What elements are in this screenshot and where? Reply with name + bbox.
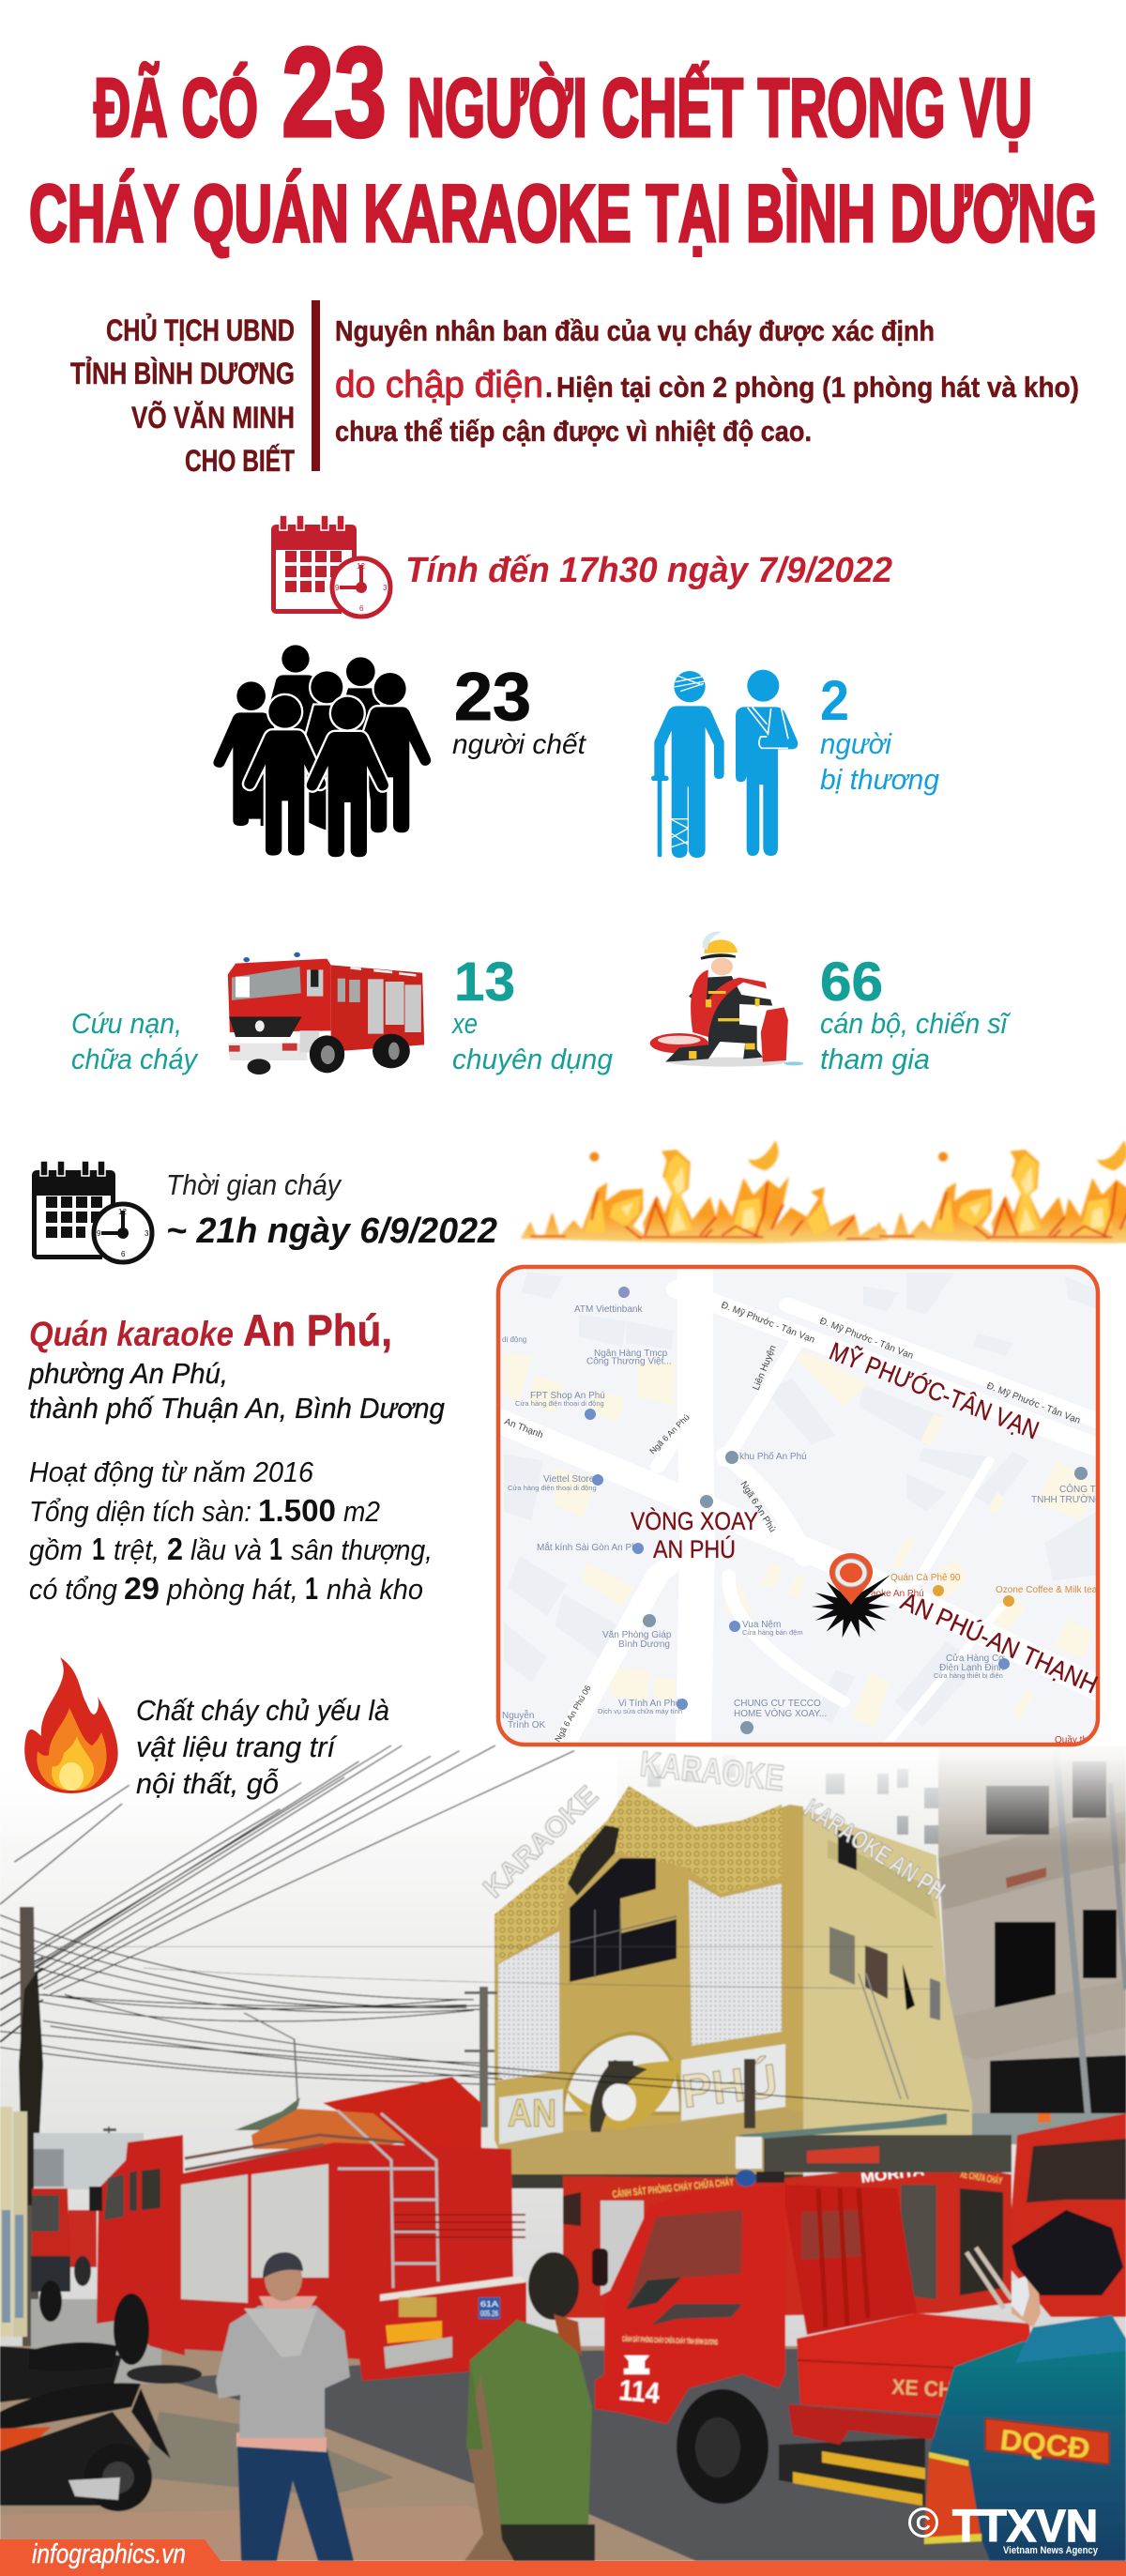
venue name: An Phú,: [243, 1305, 392, 1355]
map place labels: Ngân Hàng Tmcp: [594, 1349, 668, 1359]
title: 23: [282, 21, 387, 163]
venue details: nhà kho: [327, 1573, 423, 1606]
map place labels: Công Thương Việt...: [586, 1357, 672, 1366]
main fire truck with crane: 61A: [480, 2300, 499, 2309]
roundabout label: AN PHÚ: [653, 1534, 736, 1563]
right fire truck: [1009, 2113, 1126, 2317]
map place labels: Ngã 6 An Phú 06: [553, 1684, 593, 1744]
venue details: [29, 1456, 433, 1606]
photo: burned karaoke building and fire trucks: [0, 1727, 1126, 2576]
road label: An Phu - An Thanh: AN PHÚ-AN THẠNH: [897, 1586, 1103, 1699]
icon: black calendar with clock: 9: [97, 1229, 101, 1238]
map place labels: Vua Nệm: [742, 1620, 781, 1630]
stat: 13 vehicles: xe: [450, 1007, 478, 1040]
map place labels: Cửa hàng bán đệm: [742, 1628, 803, 1637]
karaoke building side wall: [801, 1808, 973, 2136]
venue details: lầu và: [190, 1533, 262, 1566]
karaoke building front: PHÚ: [679, 2054, 781, 2118]
map place labels: Điện Lạnh Định: [939, 1663, 1004, 1673]
map place labels: Viettel Store: [543, 1474, 595, 1485]
stat: 66 personnel: 66: [820, 952, 883, 1013]
TTXVN logo: [908, 2507, 1098, 2556]
map place labels: Đ. Mỹ Phước - Tân Vạn: [818, 1317, 915, 1362]
map place labels: Cửa hàng điện thoại di động: [515, 1399, 604, 1408]
venue address: thành phố Thuận An, Bình Dương: [29, 1392, 445, 1425]
rear fire truck: MORITA: [860, 2163, 925, 2187]
map place labels: Mắt kính Sài Gòn An Phú: [537, 1541, 642, 1553]
icon: red calendar with clock: 6: [359, 604, 364, 613]
icon: red calendar with clock: [271, 515, 390, 617]
fire time: [166, 1168, 497, 1251]
fire time: Thời gian cháy: [166, 1168, 342, 1201]
stat: 13 vehicles: [450, 952, 613, 1075]
map place labels: aoke An Phú: [871, 1589, 924, 1599]
speaker attribution: [70, 313, 295, 478]
burning materials note: [136, 1694, 389, 1800]
small pickup fire truck: XE CH: [891, 2374, 953, 2401]
map place labels: TNHH TRƯỜNG...: [1031, 1493, 1110, 1505]
as-of date heading: Tính đến 17h30 ngày 7/9/2022: [405, 551, 892, 590]
venue address: phường An Phú,: [28, 1357, 228, 1390]
map place labels: [502, 1301, 1110, 1745]
TTXVN logo: Vietnam News Agency: [1003, 2545, 1099, 2556]
map place labels: Ngã 6 An Phú: [738, 1480, 777, 1534]
map place labels: Đ. Mỹ Phước - Tân Vạn: [985, 1381, 1082, 1426]
rear fire truck: [563, 2162, 1012, 2318]
footer bar: [0, 2539, 1126, 2576]
venue details: Hoạt động từ năm 2016: [29, 1456, 314, 1488]
map place labels: khu Phố An Phú: [739, 1451, 807, 1462]
stat: 2 injured: [820, 669, 939, 796]
TTXVN logo: TTXVN: [952, 2502, 1098, 2552]
flames strip: [521, 1140, 1126, 1243]
utility poles: [19, 1907, 497, 2355]
bystander in grey hoodie: [216, 2252, 354, 2561]
map place labels: FPT Shop An Phú: [530, 1391, 605, 1401]
small pickup fire truck: 114: [617, 2373, 662, 2410]
map place labels: HOME VÒNG XOAY...: [734, 1707, 827, 1719]
right concrete building: [938, 1745, 1126, 2144]
person in blue militia vest: DQCĐ: [998, 2423, 1091, 2465]
speaker attribution: VÕ VĂN MINH: [131, 401, 295, 434]
shop awning and sign: [736, 2059, 1012, 2172]
quote: cause of the fire: .: [545, 371, 553, 404]
venue name: Quán karaoke: [29, 1315, 234, 1353]
venue details: 2: [167, 1532, 183, 1566]
fire time: ~ 21h ngày 6/9/2022: [166, 1212, 497, 1251]
stat: 23 dead: người chết: [452, 729, 587, 760]
map place labels: CÔNG TY: [1059, 1483, 1103, 1495]
map place labels: Nguyễn: [502, 1709, 534, 1721]
speaker attribution: CHO BIẾT: [185, 444, 295, 478]
map place labels: Vi Tính An Phú: [618, 1699, 680, 1709]
map place labels: ATM Viettinbank: [574, 1304, 643, 1315]
rear fire truck: CẢNH SÁT PHÒNG CHÁY CHỮA CHÁY: [612, 2175, 735, 2201]
map place labels: Văn Phòng Giáp: [602, 1630, 672, 1640]
map place labels: Quán Cà Phê 90: [890, 1573, 961, 1583]
police officer in green uniform: [464, 2252, 595, 2561]
map place labels: di động: [502, 1335, 526, 1344]
map place labels: Bình Dương: [618, 1639, 670, 1650]
map place labels: An Thạnh: [503, 1417, 544, 1440]
icon: crowd of people: [213, 645, 431, 857]
burning materials note: vật liệu trang trí: [136, 1730, 338, 1763]
icon: red calendar with clock: 12: [357, 562, 365, 571]
icon: red calendar with clock: 9: [335, 584, 340, 592]
stat: 66 personnel: [820, 952, 1012, 1075]
icon: red calendar with clock: 3: [383, 584, 388, 592]
icon: firefighter with hydrant: [650, 932, 803, 1067]
title: ĐÃ CÓ: [94, 61, 258, 154]
map place labels: Trình OK: [508, 1720, 546, 1730]
quote: cause of the fire: do chập điện: [335, 364, 543, 405]
rear fire truck: XE CHỮA CHÁY: [959, 2168, 1003, 2187]
venue name: [29, 1305, 392, 1355]
speaker attribution: CHỦ TỊCH UBND: [106, 313, 295, 347]
stat: 2 injured: bị thương: [820, 763, 939, 796]
background buildings: [0, 2097, 300, 2337]
stat: 66 personnel: tham gia: [820, 1043, 930, 1075]
background tower: [647, 1755, 939, 1867]
venue details: 1: [92, 1532, 105, 1566]
road label: My Phuoc - Tan Van: MỸ PHƯỚC-TÂN VẠN: [826, 1336, 1043, 1444]
karaoke building front: KARAOKE AN PH: [799, 1793, 951, 1906]
venue details: 1: [269, 1532, 282, 1566]
map place labels: Đ. Mỹ Phước - Tân Vạn: [720, 1301, 816, 1346]
quote: cause of the fire: chưa thể tiếp cận được vì nhiệt độ cao.: [335, 415, 812, 448]
map place labels: CHUNG CƯ TECCO: [734, 1699, 821, 1709]
ground and road: [0, 2298, 991, 2561]
map place labels: Quầy th: [1055, 1734, 1088, 1745]
venue details: có tổng: [29, 1573, 117, 1606]
top fade to white: [401, 1745, 1126, 1841]
title: [29, 21, 1097, 259]
stat: 13 vehicles: 13: [454, 952, 515, 1013]
venue details: sân thượng,: [291, 1533, 433, 1566]
overhead wires: [0, 1745, 969, 2111]
stat: 23 dead: 23: [454, 660, 531, 735]
stat: 2 injured: 2: [820, 669, 849, 732]
label: rescue and firefighting: [71, 1007, 199, 1075]
TTXVN logo: C: [916, 2511, 931, 2535]
background truck left: [31, 2188, 97, 2322]
karaoke building front: KARAOKE: [638, 1745, 786, 1799]
quote: cause of the fire: [335, 314, 1079, 448]
stat: 23 dead: [452, 660, 587, 760]
icon: injured people: [651, 670, 798, 858]
venue details: gồm: [29, 1533, 83, 1566]
karaoke building front: KARAOKE: [478, 1780, 604, 1904]
stat: 2 injured: người: [820, 727, 892, 760]
source label: infographics.vn: [32, 2539, 186, 2569]
burning materials note: Chất cháy chủ yếu là: [136, 1694, 389, 1727]
stat: 13 vehicles: chuyên dụng: [452, 1043, 613, 1075]
icon: black calendar with clock: 3: [145, 1229, 149, 1238]
icon: flame: [24, 1657, 118, 1793]
venue details: 1: [305, 1571, 318, 1606]
karaoke building front: [478, 1745, 951, 2188]
small pickup fire truck: CẢNH SÁT PHÒNG CHÁY CHỮA CHÁY TỈNH BÌNH DƯƠNG: [622, 2335, 718, 2347]
map base: [488, 1258, 1119, 1752]
motorbikes: [0, 2342, 171, 2511]
icon: fire engine: [228, 953, 424, 1075]
person in blue militia vest: [924, 2210, 1126, 2561]
burning materials note: nội thất, gỗ: [136, 1767, 279, 1800]
map place labels: Cửa hàng thiết bị điện: [934, 1671, 1003, 1680]
venue details: m2: [343, 1495, 380, 1528]
venue details: 1.500: [258, 1493, 336, 1528]
roundabout label: [631, 1506, 758, 1563]
main fire truck with crane: 005.26: [480, 2309, 498, 2318]
map panel: [488, 1258, 1119, 1752]
label: rescue and firefighting: chữa cháy: [71, 1043, 199, 1075]
map place labels: Dịch vụ sửa chữa máy tính: [598, 1707, 682, 1715]
map place labels: Ozone Coffee & Milk tea: [996, 1585, 1098, 1595]
map place labels: Cửa hàng điện thoại di động: [508, 1484, 597, 1492]
icon: black calendar with clock: 6: [121, 1250, 126, 1258]
speaker attribution: TỈNH BÌNH DƯƠNG: [70, 357, 295, 390]
icon: black calendar with clock: [32, 1161, 152, 1262]
icon: explosion with location pin: [812, 1553, 890, 1638]
stat: 66 personnel: cán bộ, chiến sĩ: [820, 1007, 1012, 1040]
icon: black calendar with clock: 12: [118, 1208, 127, 1216]
venue details: trệt,: [114, 1533, 160, 1566]
quote: cause of the fire: Nguyên nhân ban đầu của vụ cháy được xác định: [335, 314, 935, 347]
venue address: [28, 1357, 445, 1425]
small pickup fire truck: [592, 2170, 1032, 2506]
venue details: Tổng diện tích sàn:: [29, 1495, 251, 1528]
main fire truck with crane: [89, 2077, 526, 2384]
roundabout label: VÒNG XOAY: [631, 1506, 758, 1535]
map markers: [585, 1287, 1088, 1734]
venue details: 29: [124, 1571, 160, 1606]
quote: cause of the fire: Hiện tại còn 2 phòng (1 phòng hát và kho): [556, 371, 1079, 404]
map place labels: Cửa Hàng Cơ: [946, 1653, 1005, 1664]
venue details: phòng hát,: [166, 1573, 298, 1606]
building sign lettering: AN: [508, 2091, 556, 2135]
map place labels: Ngã 6 An Phú: [647, 1412, 692, 1456]
label: rescue and firefighting: Cứu nạn,: [71, 1007, 182, 1040]
divider bar: [312, 300, 320, 471]
map place labels: Liên Huyện: [752, 1344, 779, 1392]
